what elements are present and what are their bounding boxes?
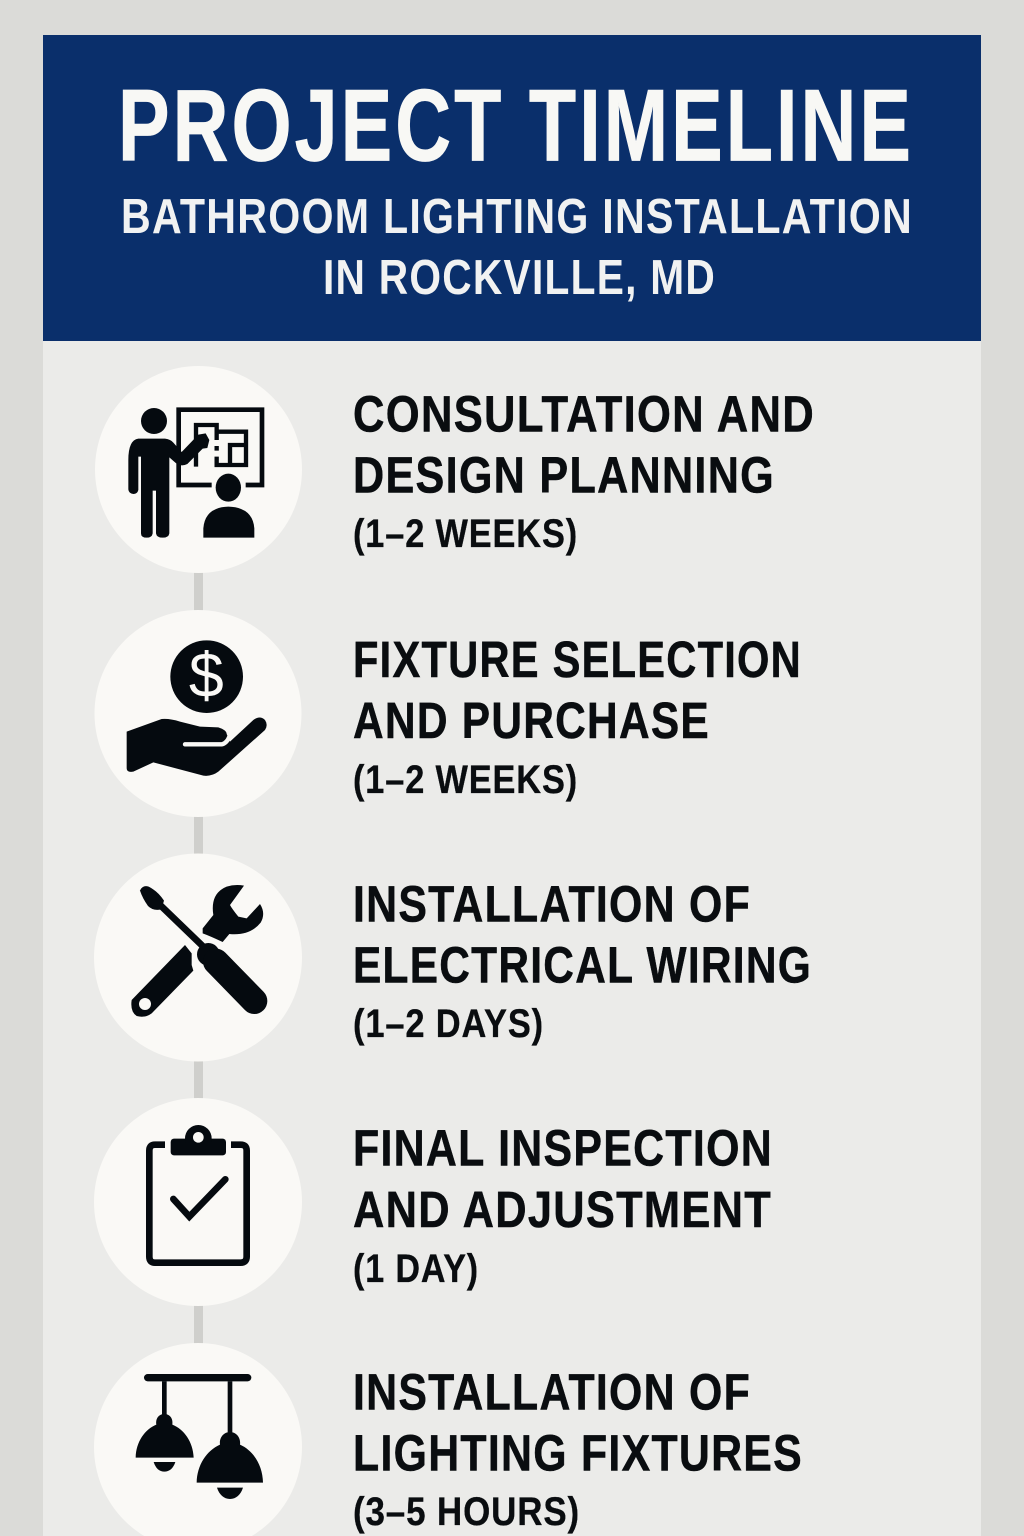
step 4 text: FINAL INSPECTION <box>353 1120 773 1176</box>
step 2: fixture selection <box>94 610 802 817</box>
step 3 text: INSTALLATION OF <box>353 876 751 932</box>
icon: presenter at floor plan board <box>95 366 302 573</box>
step 4 text: (1 DAY) <box>353 1247 479 1291</box>
step 3 text <box>353 876 812 1046</box>
step 3 text: (1–2 DAYS) <box>353 1002 544 1046</box>
subtitle: IN ROCKVILLE, MD <box>323 251 716 305</box>
step 3: electrical wiring <box>94 854 812 1062</box>
step 4 text: AND ADJUSTMENT <box>353 1181 772 1238</box>
step 1: consultation <box>95 366 815 573</box>
header banner <box>43 35 981 341</box>
timeline connectors <box>194 570 203 1345</box>
step 5 text: LIGHTING FIXTURES <box>353 1424 803 1482</box>
icon: crossed screwdriver and wrench <box>94 854 302 1062</box>
step 1 text: (1–2 WEEKS) <box>353 512 578 556</box>
step 2 text: (1–2 WEEKS) <box>353 758 578 802</box>
step 5 text <box>353 1364 803 1534</box>
icon: clipboard with check mark <box>94 1098 302 1306</box>
step 1 text: CONSULTATION AND <box>353 386 815 442</box>
icon: pendant lights <box>94 1343 302 1536</box>
step 2 text <box>353 631 802 802</box>
subtitle <box>121 190 913 305</box>
step 3 text: ELECTRICAL WIRING <box>353 936 812 994</box>
step 5 text: INSTALLATION OF <box>353 1364 751 1420</box>
step 1 text: DESIGN PLANNING <box>353 446 775 504</box>
step 4: final inspection <box>94 1098 773 1306</box>
step 2 text: AND PURCHASE <box>353 692 710 749</box>
icon: hand holding dollar coin: $ <box>189 641 224 711</box>
step 5 text: (3–5 HOURS) <box>353 1490 580 1534</box>
icon: hand holding dollar coin <box>94 610 302 817</box>
step 1 text <box>353 386 815 556</box>
step 4 text <box>353 1120 773 1291</box>
step 5: lighting fixtures <box>94 1343 803 1536</box>
step 2 text: FIXTURE SELECTION <box>353 631 802 688</box>
